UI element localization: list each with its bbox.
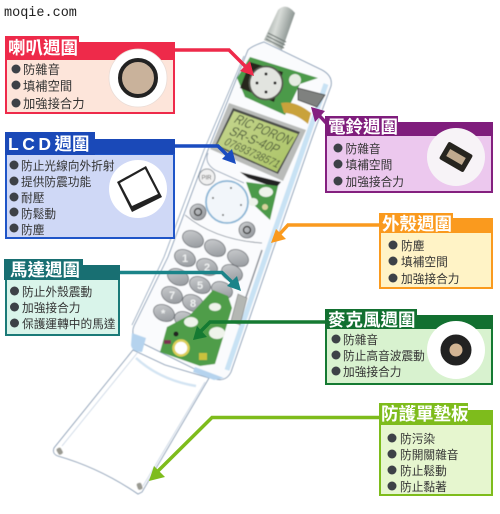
PIR button: PIR — [202, 176, 212, 182]
list: 填補空間 — [346, 158, 392, 172]
icon: speaker ring — [120, 60, 156, 96]
keypad digits: 1 — [182, 253, 188, 265]
list: 防止黏著 — [400, 480, 447, 494]
middle circuit board — [240, 172, 281, 220]
ringer part — [281, 74, 325, 124]
heading: 外殼週圍 — [382, 214, 452, 234]
panel: guard pad — [149, 403, 493, 495]
list: 防鬆動 — [21, 207, 56, 221]
list: 防塵 — [401, 239, 425, 253]
heading: 麥克風週圍 — [328, 310, 416, 330]
list: 填補空間 — [401, 255, 448, 269]
keypad digits — [161, 253, 210, 320]
keypad digits: 8 — [190, 298, 196, 310]
LCD screen: RIC PORON — [231, 112, 296, 147]
keypad digits: 7 — [169, 290, 175, 302]
list: 加強接合力 — [401, 272, 459, 286]
heading: LCD週圍 — [8, 134, 89, 154]
heading: 電鈴週圍 — [328, 117, 398, 137]
LCD screen: SR-S-40P — [226, 124, 283, 156]
list: 防污染 — [400, 432, 435, 446]
PIR button — [199, 169, 215, 185]
phone body — [133, 42, 331, 380]
list — [334, 142, 404, 189]
list: 保護運轉中的馬達 — [22, 317, 116, 331]
watermark: moqie.com — [4, 6, 77, 21]
LCD screen: 07693738571 — [221, 136, 283, 170]
hinge — [131, 333, 224, 380]
list — [332, 333, 425, 379]
navigation pad — [206, 181, 248, 223]
antenna — [264, 7, 295, 50]
panel: shell — [271, 213, 493, 288]
list: 防雜音 — [346, 142, 381, 156]
list: 加強接合力 — [346, 175, 404, 189]
list — [10, 159, 115, 237]
icon: LCD frame — [117, 166, 162, 212]
list: 耐壓 — [21, 192, 45, 205]
panel: motor — [4, 259, 241, 335]
panel: LCD — [5, 132, 236, 238]
list: 防雜音 — [343, 333, 378, 347]
icon: ringer part — [439, 141, 473, 173]
list: 加強接合力 — [343, 365, 401, 379]
list — [388, 432, 459, 494]
keypad digits: 2 — [204, 262, 210, 274]
top circuit board — [237, 57, 318, 115]
heading: 防護單墊板 — [381, 404, 469, 424]
list — [10, 285, 116, 331]
list — [388, 239, 459, 286]
phone illustration — [54, 7, 331, 494]
list: 填補空間 — [23, 78, 72, 94]
panel: microphone — [193, 309, 493, 384]
keypad — [151, 204, 255, 332]
panel: ringer — [311, 107, 493, 192]
list: 防止鬆動 — [400, 464, 447, 478]
icon: microphone ring — [445, 339, 467, 361]
lower circuit board — [160, 290, 232, 366]
list: 防雜音 — [23, 62, 60, 77]
list: 提供防震功能 — [21, 175, 91, 189]
list: 防塵 — [21, 223, 45, 237]
panel: speaker — [5, 36, 254, 113]
keypad digits: * — [161, 308, 166, 320]
heading: 馬達週圍 — [10, 260, 80, 280]
list: 防止高音波震動 — [343, 349, 425, 363]
motor — [231, 294, 247, 325]
list: 防止外殼震動 — [22, 285, 92, 299]
speaker — [250, 66, 282, 100]
heading: 喇叭週圍 — [8, 38, 78, 58]
list: 加強接合力 — [23, 96, 84, 111]
LCD screen — [210, 103, 306, 181]
list: 加強接合力 — [22, 301, 80, 315]
list — [12, 62, 84, 111]
list: 防止光線向外折射 — [21, 159, 115, 173]
flip cover — [54, 350, 209, 494]
list: 防開關雜音 — [400, 448, 459, 462]
keypad digits: 5 — [197, 280, 203, 292]
